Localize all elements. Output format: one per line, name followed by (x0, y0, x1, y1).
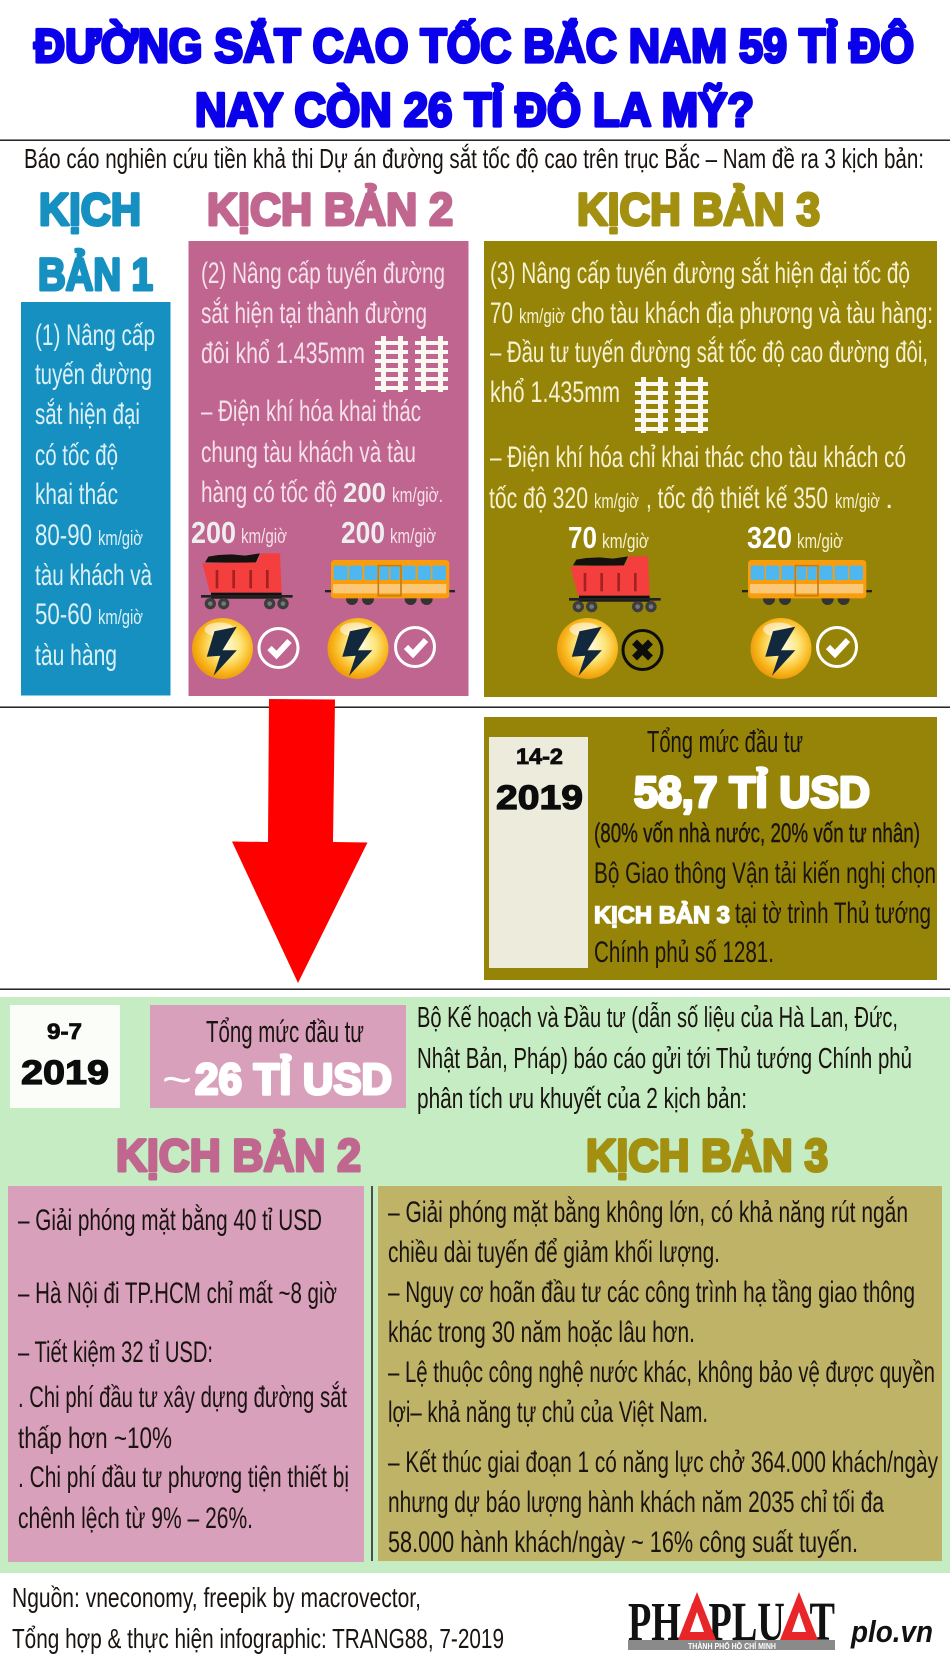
panel: scenario 2: (2) Nâng cấp tuyến đường (201, 257, 445, 290)
panel: scenario 2: đôi khổ 1.435mm (201, 337, 365, 370)
ministry report text: phân tích ưu khuyết của 2 kịch bản: (417, 1083, 747, 1115)
date box: 14-2 (516, 744, 563, 769)
source credits: Nguồn: vneconomy, freepik by macrovector, (12, 1582, 421, 1613)
logo: Pháp Luật (628, 1591, 835, 1652)
panel: scenario 2: sắt hiện tại thành đường (201, 297, 427, 330)
panel: scenario 1: (1) Nâng cấp (35, 319, 155, 352)
icon: electricity bolt (557, 618, 618, 679)
speed label: freight 200: 200 (191, 515, 236, 550)
panel: scenario 2 analysis: thấp hơn ~10% (18, 1422, 172, 1455)
icon: passenger carriage (742, 560, 872, 605)
panel: scenario 3: khổ 1.435mm (490, 376, 620, 409)
panel: scenario 1: 80-90 (35, 519, 92, 552)
panel: 14-2-2019 proposal: KỊCH BẢN 3 (594, 900, 730, 929)
icon: electricity bolt (328, 618, 388, 679)
date box: 9-7 (47, 1019, 82, 1044)
panel: scenario 2: 200 (343, 477, 386, 508)
heading: scenario 3: KỊCH BẢN 3 (586, 1130, 828, 1181)
heading: scenario 2: KỊCH BẢN 2 (207, 184, 453, 235)
panel: scenario 2: chung tàu khách và tàu (201, 436, 416, 469)
panel: scenario 2: – Điện khí hóa khai thác (201, 395, 421, 428)
date box: 2019 (21, 1054, 109, 1092)
panel: scenario 1: 50-60 (35, 598, 92, 631)
icon: coal wagon (201, 553, 293, 609)
source credits: Tổng hợp & thực hiện infographic: TRANG88, 7-2019 (12, 1623, 504, 1654)
speed label: passenger 320: km/giờ (797, 531, 843, 553)
heading: scenario 1: BẢN 1 (38, 249, 153, 300)
panel: scenario 2 analysis: chênh lệch từ 9% – 26%. (18, 1502, 253, 1535)
panel: 14-2-2019 proposal: Chính phủ số 1281. (594, 936, 774, 969)
panel: scenario 1: km/giờ (98, 607, 143, 629)
arrow: down (232, 699, 368, 983)
heading: scenario 1: KỊCH (39, 184, 141, 235)
icon: rail tracks (375, 336, 448, 392)
speed label: passenger 200: 200 (341, 515, 385, 550)
icon: electricity bolt (192, 618, 253, 679)
logo: Pháp Luật: THÀNH PHỐ HỒ CHÍ MINH (688, 1641, 776, 1651)
icon: check mark (818, 628, 856, 666)
icon: passenger carriage (325, 560, 455, 605)
date box (489, 737, 588, 968)
panel: scenario 1: km/giờ (98, 528, 143, 550)
logo: plo.vn: plo.vn (850, 1614, 933, 1649)
total investment box (150, 1005, 406, 1108)
panel: scenario 3 analysis (378, 1186, 942, 1561)
panel: scenario 3: . (885, 482, 893, 515)
speed label: passenger 320 (747, 520, 843, 555)
panel: scenario 1: tuyến đường (35, 358, 152, 391)
speed label: freight 200: km/giờ (241, 526, 287, 548)
icon: rail tracks (635, 377, 708, 433)
panel: scenario 2 analysis: . Chi phí đầu tư xây dựng đường sắt (18, 1381, 347, 1414)
speed label: freight 70: 70 (568, 520, 597, 555)
total investment box: Tổng mức đầu tư (206, 1014, 364, 1049)
speed label: freight 200 (191, 515, 287, 550)
date box: 2019 (496, 779, 583, 817)
icon: check mark (396, 628, 434, 666)
speed label: freight 70 (568, 520, 649, 555)
panel: scenario 1 (21, 302, 170, 696)
speed label: passenger 320: 320 (747, 520, 792, 555)
source credits (12, 1582, 504, 1654)
panel: scenario 1: tàu hàng (35, 639, 117, 672)
speed label: freight 70: km/giờ (602, 531, 649, 553)
panel: scenario 1: sắt hiện đại (35, 398, 140, 431)
panel: scenario 2: km/giờ. (392, 485, 443, 507)
panel: green comparison section (0, 997, 950, 1573)
speed label: passenger 200 (341, 515, 436, 550)
panel: scenario 3: km/giờ (835, 491, 880, 513)
panel: scenario 2 analysis (8, 1186, 364, 1562)
speed label: passenger 200: km/giờ (390, 526, 436, 548)
panel: scenario 2: hàng có tốc độ (201, 476, 337, 509)
icon: check mark (259, 628, 298, 668)
panel: scenario 3 analysis: lợi– khả năng tự chủ của Việt Nam. (388, 1396, 708, 1429)
heading: scenario 1 (38, 184, 153, 300)
panel: 14-2-2019 proposal: 58,7 TỈ USD (634, 767, 870, 817)
panel: scenario 3: km/giờ (519, 306, 565, 328)
icon: coal wagon (569, 556, 661, 612)
heading: scenario 3: KỊCH BẢN 3 (577, 184, 820, 235)
logo: Pháp Luật: PHAPLUAT (628, 1591, 835, 1652)
panel: scenario 3: km/giờ (594, 491, 639, 513)
panel: scenario 3: tốc độ 320 (489, 482, 588, 515)
panel: 14-2-2019 proposal: Tổng mức đầu tư (647, 724, 803, 759)
panel: scenario 2 (188, 241, 468, 696)
date box (10, 1005, 120, 1108)
heading: scenario 2: KỊCH BẢN 2 (116, 1130, 361, 1181)
title: NAY CÒN 26 TỈ ĐÔ LA MỸ? (195, 83, 754, 136)
ministry report text (417, 1001, 912, 1115)
panel: scenario 3: , tốc độ thiết kế 350 (646, 482, 828, 515)
title (34, 19, 914, 136)
panel: scenario 1: khai thác (35, 478, 118, 511)
icon: cross mark (623, 630, 662, 670)
panel: scenario 2 analysis: – Tiết kiệm 32 tỉ USD: (18, 1336, 213, 1369)
panel: scenario 1: có tốc độ (35, 439, 118, 472)
panel: scenario 3 (484, 241, 937, 697)
panel: scenario 1: tàu khách và (35, 559, 152, 592)
panel: scenario 3 analysis: khác trong 30 năm hoặc lâu hơn. (388, 1316, 695, 1349)
panel: 14-2-2019 proposal (484, 717, 937, 980)
panel: scenario 2 analysis: – Hà Nội đi TP.HCM chỉ mất ~8 giờ (18, 1277, 337, 1310)
panel: scenario 3: 70 (490, 297, 513, 330)
total investment box: 26 TỈ USD (195, 1054, 392, 1104)
panel: scenario 2 analysis: . Chi phí đầu tư phương tiện thiết bị (18, 1461, 349, 1494)
panel: scenario 2 analysis: – Giải phóng mặt bằng 40 tỉ USD (18, 1204, 322, 1237)
icon: electricity bolt (750, 618, 812, 679)
panel: scenario 3 analysis: chiều dài tuyến để giảm khối lượng. (388, 1236, 720, 1269)
total investment box: ~ (162, 1054, 192, 1105)
